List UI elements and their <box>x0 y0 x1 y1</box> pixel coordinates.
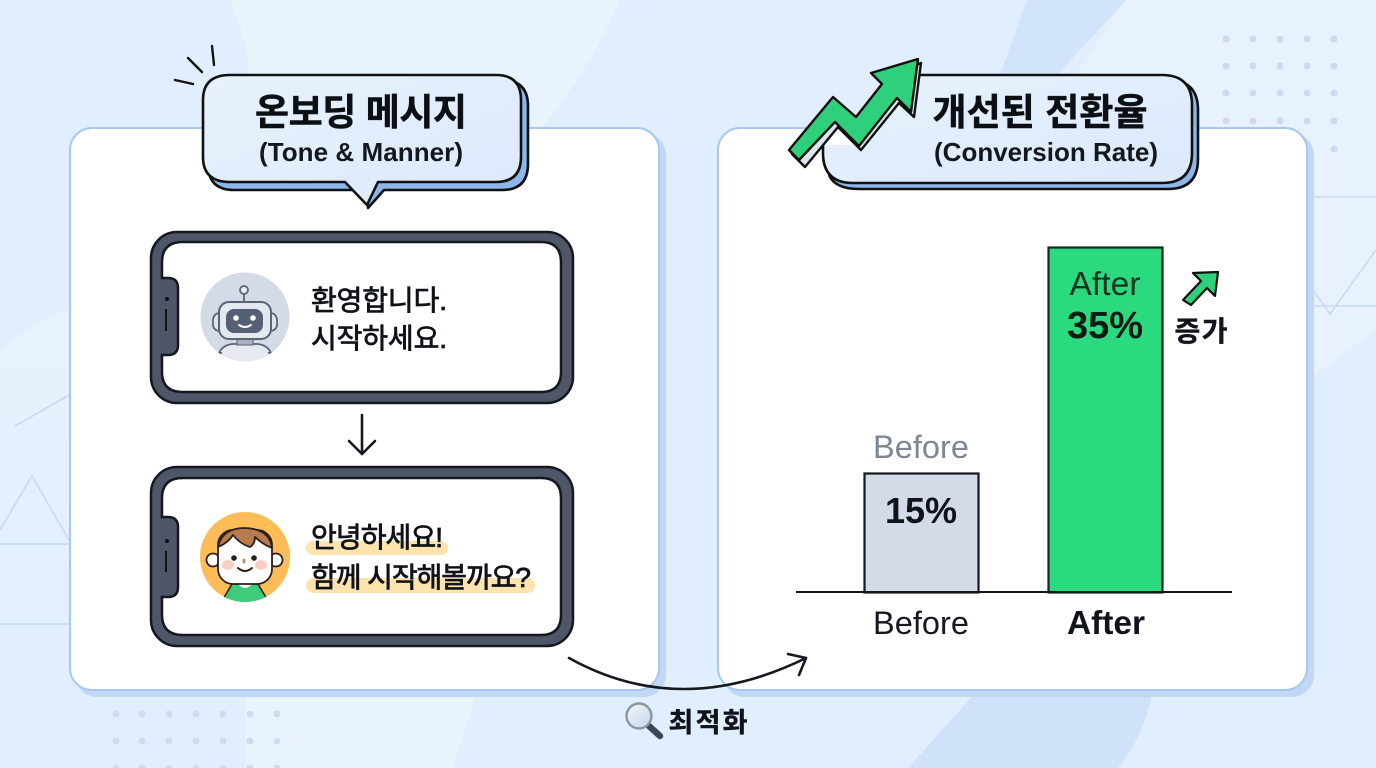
message text: 함께 시작해볼까요? <box>311 562 531 593</box>
subtitle text: (Conversion Rate) <box>934 137 1158 167</box>
panel: conversion rate <box>718 128 1314 697</box>
title text: 개선된 전환율 <box>932 92 1148 133</box>
message text: 환영합니다. <box>311 285 447 316</box>
phone: friendly message <box>151 467 573 646</box>
heading bubble: onboarding message <box>203 75 528 208</box>
bar: before 15%: 15% <box>885 490 957 531</box>
icon: rising green arrow <box>789 59 921 167</box>
panel: onboarding message <box>70 128 666 697</box>
message text: 안녕하세요! <box>311 522 443 553</box>
icon: robot avatar <box>200 272 290 364</box>
arrow: message transformation <box>349 415 375 454</box>
message text <box>311 285 447 354</box>
bar: before 15%: Before <box>873 429 969 465</box>
label: optimization: 최적화 <box>668 708 748 738</box>
icon: magnifying glass <box>626 704 660 736</box>
bar: before 15% <box>864 429 978 592</box>
icon: child avatar <box>200 512 290 606</box>
message highlights <box>306 541 535 593</box>
message text <box>311 522 531 593</box>
icon: emphasis sparks <box>175 46 214 84</box>
title text: 온보딩 메시지 <box>255 92 467 133</box>
axis label: after: After <box>1067 605 1145 642</box>
dot grid top right <box>1222 36 1338 152</box>
arrow: optimization flow <box>569 654 806 689</box>
bar: after 35% <box>1048 248 1162 592</box>
subtitle text: (Tone & Manner) <box>259 137 463 167</box>
bar: after 35%: After <box>1070 266 1140 303</box>
callout: increase: 증가 <box>1174 316 1228 347</box>
phone: robotic message <box>151 232 573 403</box>
bar: after 35%: 35% <box>1067 305 1143 347</box>
axis label: before: Before <box>873 605 969 641</box>
heading bubble: conversion rate <box>823 75 1198 189</box>
axis baseline <box>796 591 1232 593</box>
bar chart <box>796 248 1232 642</box>
label: optimization <box>626 704 748 738</box>
dot grid bottom left <box>112 710 280 768</box>
callout: increase <box>1174 272 1228 347</box>
message text: 시작하세요. <box>311 323 447 354</box>
